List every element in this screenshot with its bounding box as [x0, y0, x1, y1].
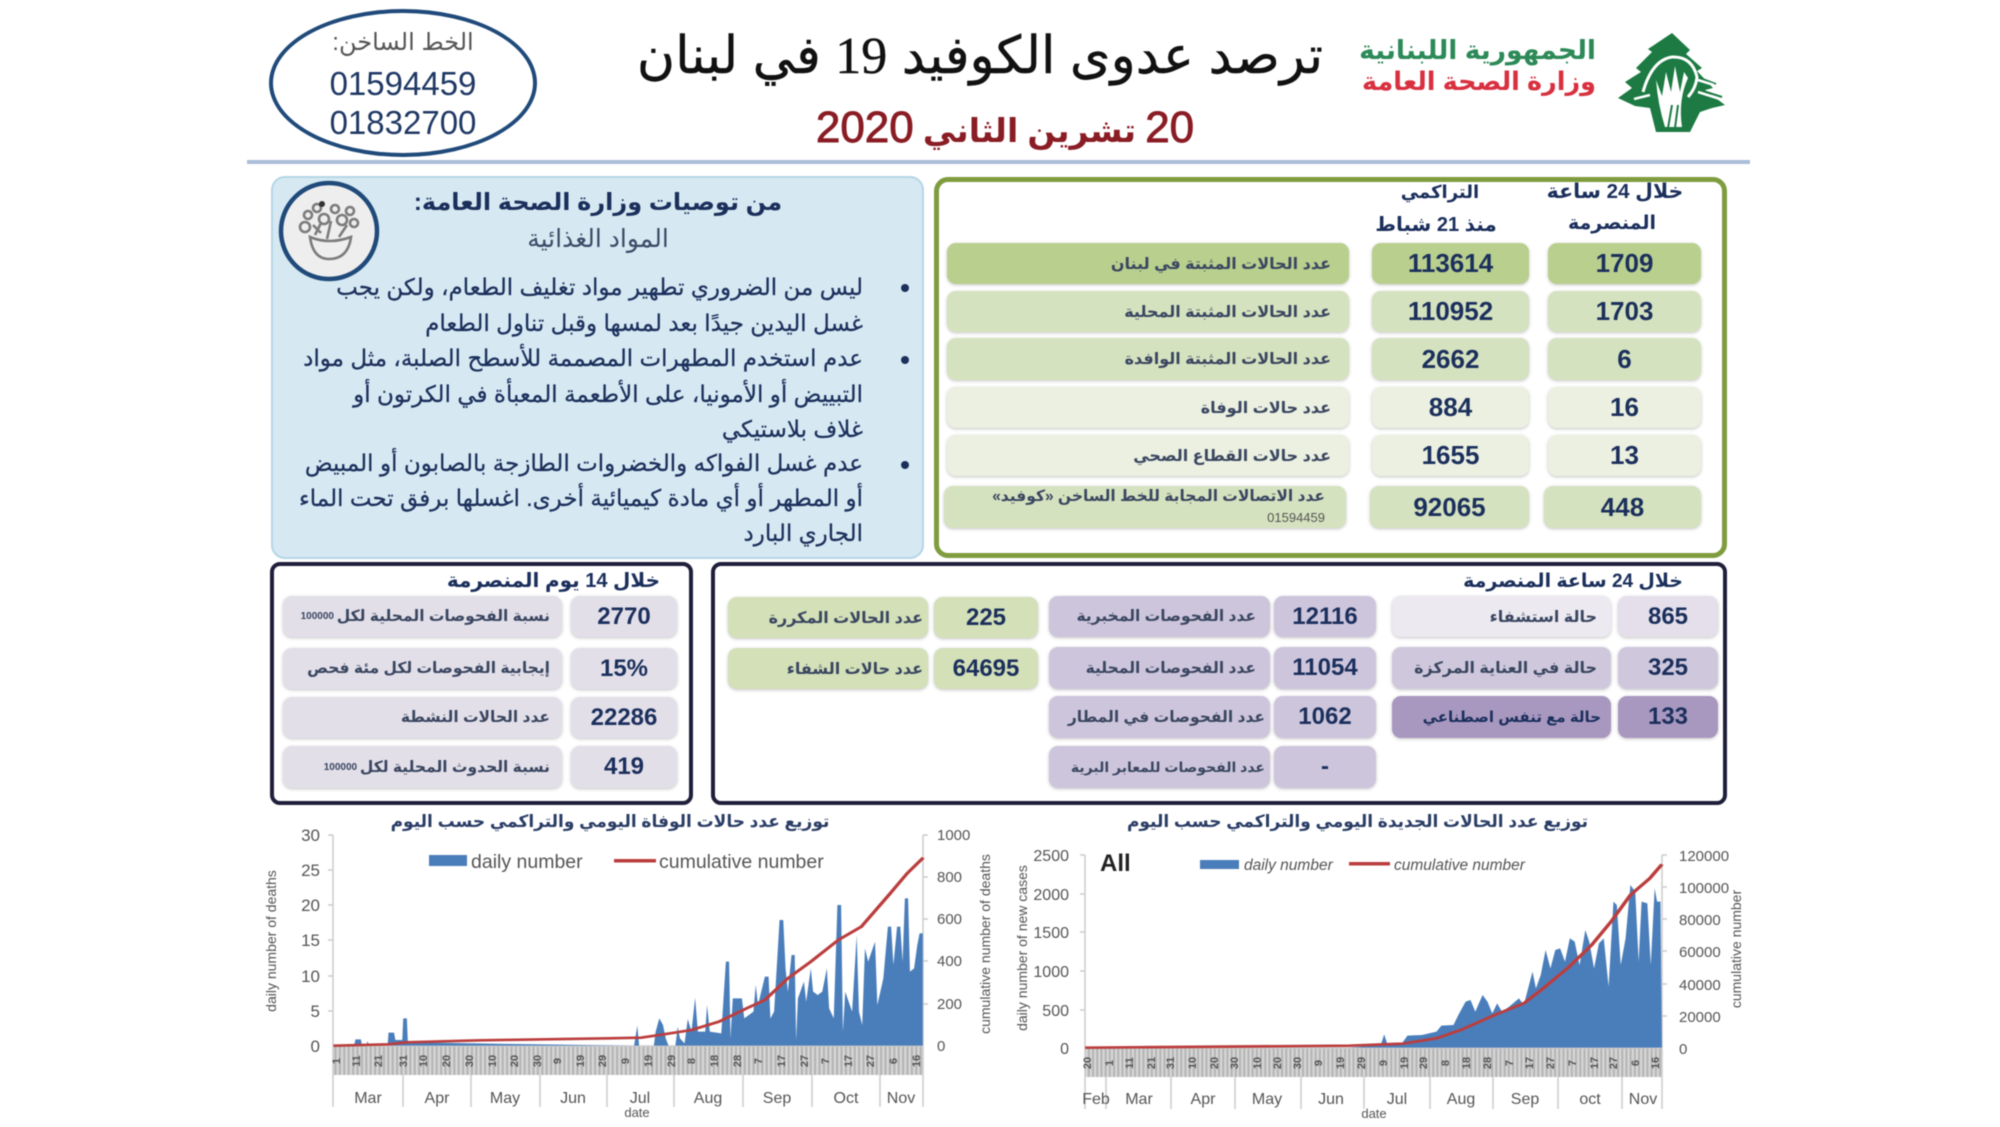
column header: last 24 hours: خلال 24 ساعة [1547, 180, 1683, 203]
month labels: Jun [1318, 1091, 1344, 1108]
panel: cases table [934, 177, 1727, 558]
row: tests per 100000: 100000 [301, 611, 334, 622]
tick labels: 20 [1272, 1057, 1284, 1069]
column header: last 24 hours: المنصرمة [1568, 213, 1656, 234]
tick labels: 7 [753, 1058, 765, 1064]
month labels [354, 1090, 915, 1120]
row: incidence: 419 [604, 753, 644, 780]
tick labels: 21 [1146, 1057, 1158, 1069]
row: repeated cases: عدد الحالات المكررة [769, 610, 923, 626]
tick labels: 17 [843, 1055, 855, 1067]
month labels [1082, 1091, 1657, 1121]
tick labels: 9 [552, 1058, 564, 1064]
tick labels: 10 [418, 1055, 430, 1067]
row: hotline calls: 92065 [1413, 492, 1486, 522]
row: tests per 100000 [281, 595, 679, 640]
row: lab tests: 12116 [1292, 602, 1358, 630]
row: ventilated [1390, 695, 1720, 741]
tick labels: 27 [799, 1055, 811, 1067]
row: local tests: عدد الفحوصات المحلية [1086, 660, 1256, 676]
tick labels: 20 [509, 1055, 521, 1067]
right axis numbers: 80000 [1679, 912, 1721, 929]
row: confirmed cases: 113614 [1408, 248, 1493, 278]
right axis numbers [1679, 848, 1729, 1058]
tick labels: 19 [643, 1055, 655, 1067]
left axis numbers: 1000 [1033, 964, 1069, 981]
legend [429, 851, 824, 873]
month labels: Jul [1387, 1091, 1407, 1108]
row: hospitalised: حالة استشفاء [1490, 608, 1597, 626]
recommendations heading: من توصيات وزارة الصحة العامة: [414, 189, 782, 216]
month labels: oct [1579, 1091, 1601, 1108]
bullet three: عدم غسل الفواكه والخضروات الطازجة بالصابون أو المبيض [305, 450, 863, 476]
tick labels: 10 [487, 1055, 499, 1067]
chart: daily and cumulative deaths: cumulative number of deaths [977, 854, 993, 1034]
tick labels: 31 [398, 1055, 410, 1067]
row: local cases: 110952 [1408, 296, 1493, 326]
tick labels: 11 [1124, 1057, 1136, 1069]
row: hotline calls: 448 [1601, 492, 1644, 522]
tick labels: 9 [620, 1058, 632, 1064]
row: incidence: 100000 [324, 762, 357, 772]
tick labels: 30 [532, 1055, 544, 1067]
tick labels: 30 [1292, 1057, 1304, 1069]
right axis numbers: 200 [937, 996, 962, 1013]
cumulative line [333, 858, 923, 1046]
tick labels: 8 [1440, 1060, 1452, 1066]
row: health sector cases [945, 434, 1703, 479]
panel: last 14 days [270, 562, 693, 805]
month labels: date [624, 1105, 650, 1120]
left axis numbers: 5 [311, 1002, 320, 1021]
column header: cumulative [1375, 182, 1497, 236]
month labels: Apr [425, 1090, 450, 1107]
month labels: Sep [763, 1090, 791, 1107]
left axis numbers: 0 [311, 1037, 320, 1056]
tick labels: 28 [732, 1055, 744, 1067]
tick labels: 17 [1524, 1057, 1536, 1069]
left axis numbers: 0 [1060, 1041, 1069, 1058]
tick labels: 27 [1545, 1057, 1557, 1069]
legend: cumulative number [659, 851, 824, 873]
bullet three: أو المطهر أو أي مادة كيميائية أخرى. اغسلها برفق تحت الماء [299, 485, 863, 511]
row: imported cases [945, 337, 1703, 383]
row: local tests [1047, 646, 1378, 692]
left axis numbers: 2500 [1033, 848, 1069, 865]
bullet list [299, 274, 910, 548]
main title: ترصد عدوى الكوفيد 19 في لبنان [637, 27, 1323, 85]
tick labels: 8 [686, 1058, 698, 1064]
left axis numbers [1033, 848, 1069, 1058]
month labels: Oct [834, 1090, 859, 1107]
right axis numbers [937, 827, 970, 1055]
row: recovered cases: عدد حالات الشفاء [787, 660, 923, 678]
tick labels: 29 [597, 1055, 609, 1067]
row: land border tests [1047, 745, 1378, 791]
tick labels: 18 [709, 1055, 721, 1067]
left axis numbers: 25 [301, 861, 320, 880]
row: repeated cases [726, 596, 1040, 641]
row: confirmed cases [945, 242, 1703, 287]
row: repeated cases: 225 [966, 604, 1006, 630]
row: intensive care: 325 [1648, 654, 1688, 681]
row: hotline calls: عدد الاتصالات المجابة للخط الساخن «كوفيد» [992, 488, 1325, 505]
row: airport tests: 1062 [1298, 703, 1352, 730]
tick labels: 29 [1418, 1057, 1430, 1069]
tick labels [331, 1055, 923, 1067]
row: ventilated: 133 [1648, 703, 1688, 730]
tick labels: 1 [1104, 1060, 1116, 1066]
chart: daily and cumulative cases: cumulative number [1728, 890, 1744, 1008]
row: hospitalised: 865 [1648, 602, 1688, 630]
legend: daily number [471, 851, 583, 873]
right axis numbers: 0 [937, 1038, 945, 1055]
left axis numbers: 15 [301, 931, 320, 950]
tick labels: 17 [1589, 1057, 1601, 1069]
month labels: Jul [630, 1090, 650, 1107]
column header: last 24 hours [1547, 180, 1683, 234]
left axis numbers: 10 [301, 967, 320, 986]
row: active cases [281, 696, 679, 741]
bullet three [299, 447, 910, 548]
row: hotline calls [942, 485, 1703, 531]
axes and month separators [328, 835, 928, 1107]
row: lab tests [1047, 595, 1378, 640]
right axis numbers: 60000 [1679, 944, 1721, 961]
panel: last 24 hours [711, 562, 1727, 805]
tick labels: 19 [1335, 1057, 1347, 1069]
tick labels: 20 [1082, 1057, 1094, 1069]
bullet two: التبييض أو الأمونيا، على الأطعمة المعبأة في الكرتون أو [353, 381, 863, 407]
legend [1200, 857, 1526, 874]
month labels: May [490, 1090, 520, 1107]
month labels: Mar [1125, 1091, 1153, 1108]
row: positivity [281, 647, 679, 692]
panel: recommendations [271, 176, 924, 559]
row: deaths: عدد حالات الوفاة [1201, 400, 1331, 416]
month labels: Aug [694, 1090, 722, 1107]
hotline label: الخط الساخن: [332, 29, 474, 56]
all marker: All [1100, 850, 1131, 877]
bullet one: ليس من الضروري تطهير مواد تغليف الطعام، ولكن يجب [336, 274, 863, 300]
left axis numbers: 30 [301, 826, 320, 845]
row: positivity: 15% [600, 654, 648, 682]
right axis numbers: 40000 [1679, 977, 1721, 994]
row: tests per 100000: 2770 [597, 602, 651, 630]
bullet two: عدم استخدم المطهرات المصممة للأسطح الصلبة، مثل مواد [303, 345, 863, 371]
chart: daily and cumulative deaths [265, 826, 993, 1120]
right axis numbers: 120000 [1679, 848, 1729, 865]
bullet one [336, 274, 910, 338]
row: imported cases: 6 [1617, 344, 1632, 374]
row: intensive care: حالة في العناية المركزة [1414, 660, 1597, 677]
row: deaths: 16 [1610, 392, 1639, 422]
row: hospitalised [1390, 595, 1720, 640]
tick labels: 28 [1482, 1057, 1494, 1069]
row: recovered cases: 64695 [953, 654, 1019, 682]
row: health sector cases: عدد حالات القطاع الصحي [1133, 448, 1331, 464]
tick labels: 19 [1399, 1057, 1411, 1069]
tick labels: 16 [1650, 1057, 1662, 1069]
tick labels: 27 [1608, 1057, 1620, 1069]
row: tests per 100000: نسبة الفحوصات المحلية لكل [337, 608, 550, 625]
row: airport tests: عدد الفحوصات في المطار [1068, 708, 1265, 726]
tick labels: 11 [351, 1055, 363, 1067]
row: health sector cases: 13 [1610, 440, 1639, 470]
month labels: Sep [1511, 1091, 1539, 1108]
month labels: Apr [1191, 1091, 1216, 1108]
tick labels: 7 [820, 1058, 832, 1064]
row: airport tests [1047, 695, 1378, 741]
chart: cases title: توزيع عدد الحالات الجديدة اليومي والتراكمي حسب اليوم [1127, 812, 1588, 831]
left axis numbers: 2000 [1033, 887, 1069, 904]
row: land border tests: - [1321, 753, 1329, 780]
tick labels: 7 [1504, 1060, 1516, 1066]
legend: cumulative number [1394, 857, 1526, 874]
row: recovered cases [726, 647, 1040, 692]
tick labels: 19 [575, 1055, 587, 1067]
tick labels: 30 [464, 1055, 476, 1067]
column header: cumulative: التراكمي [1401, 182, 1479, 202]
row: local cases: عدد الحالات المثبتة المحلية [1124, 304, 1331, 320]
right axis numbers: 800 [937, 869, 962, 886]
month labels: Aug [1447, 1091, 1475, 1108]
tick labels: 9 [1378, 1060, 1390, 1066]
tick labels: 30 [1229, 1057, 1241, 1069]
right axis numbers: 20000 [1679, 1009, 1721, 1026]
right axis numbers: 600 [937, 911, 962, 928]
row: active cases: 22286 [591, 704, 657, 730]
left axis numbers: 1500 [1033, 925, 1069, 942]
row: health sector cases: 1655 [1422, 440, 1479, 470]
row: active cases: عدد الحالات النشطة [401, 709, 550, 726]
row: lab tests: عدد الفحوصات المخبرية [1076, 608, 1256, 625]
month labels: Feb [1082, 1091, 1110, 1108]
month labels: Nov [887, 1090, 915, 1107]
chart: deaths title: توزيع عدد حالات الوفاة اليومي والتراكمي حسب اليوم [391, 812, 829, 831]
row: confirmed cases: 1709 [1596, 248, 1653, 278]
tick labels: 10 [1252, 1057, 1264, 1069]
left axis numbers [301, 826, 320, 1056]
daily bars [1085, 864, 1662, 1048]
tick labels: 10 [1187, 1057, 1199, 1069]
column header: cumulative: منذ 21 شباط [1375, 214, 1497, 236]
tick labels: 16 [911, 1055, 923, 1067]
row: local tests: 11054 [1292, 654, 1358, 681]
axes and month separators [1080, 855, 1667, 1109]
row: positivity: إيجابية الفحوصات لكل مئة فحص [307, 660, 550, 677]
row: local cases: 1703 [1596, 296, 1653, 326]
republic line: الجمهورية اللبنانية [1359, 35, 1596, 65]
right axis numbers: 0 [1679, 1041, 1687, 1058]
row: hotline calls: 01594459 [1267, 510, 1325, 525]
month labels: Mar [354, 1090, 382, 1107]
bullet two: غلاف بلاستيكي [722, 416, 863, 442]
cumulative line [1085, 864, 1662, 1048]
row: imported cases: عدد الحالات المثبتة الوافدة [1125, 351, 1331, 368]
hotline ellipse [269, 9, 537, 157]
tick labels: 18 [1461, 1057, 1473, 1069]
row: imported cases: 2662 [1422, 344, 1479, 374]
row: ventilated: حالة مع تنفس اصطناعي [1423, 709, 1601, 726]
row: land border tests: عدد الفحوصات للمعابر البرية [1071, 758, 1265, 774]
row: confirmed cases: عدد الحالات المثبتة في لبنان [1111, 256, 1331, 272]
row: intensive care [1390, 646, 1720, 692]
row: incidence [281, 745, 679, 791]
right axis numbers: 400 [937, 953, 962, 970]
row: deaths: 884 [1429, 392, 1472, 422]
tick labels: 6 [888, 1058, 900, 1064]
tick labels: 6 [1630, 1060, 1642, 1066]
tick band [333, 1046, 923, 1075]
tick labels: 29 [666, 1055, 678, 1067]
month labels: Jun [560, 1090, 586, 1107]
tick labels: 1 [331, 1058, 343, 1064]
row: local cases [945, 290, 1703, 335]
month labels: Nov [1629, 1091, 1657, 1108]
tick labels: 27 [865, 1055, 877, 1067]
tick labels: 20 [1209, 1057, 1221, 1069]
left axis numbers: 500 [1042, 1003, 1069, 1020]
bullet two [303, 343, 910, 444]
ministry name [1359, 35, 1596, 97]
tick labels: 31 [1165, 1057, 1177, 1069]
tick labels: 7 [1567, 1060, 1579, 1066]
row: deaths [945, 386, 1703, 431]
bullet one: غسل اليدين جيدًا بعد لمسها وقبل تناول الطعام [425, 310, 863, 336]
hotline number two: 01832700 [330, 104, 476, 141]
date heading: 20 تشرين الثاني 2020 [816, 103, 1194, 152]
tick band [1085, 1048, 1662, 1077]
tick labels: 21 [373, 1055, 385, 1067]
recommendations subheading: المواد الغذائية [527, 225, 669, 253]
daily bars [333, 858, 923, 1046]
heading: last 24 hours: خلال 24 ساعة المنصرمة [1463, 571, 1683, 592]
right axis numbers: 1000 [937, 827, 970, 844]
right axis numbers: 100000 [1679, 880, 1729, 897]
left axis numbers: 20 [301, 896, 320, 915]
tick labels: 29 [1356, 1057, 1368, 1069]
chart: daily and cumulative cases [1015, 848, 1744, 1121]
tick labels [1082, 1057, 1662, 1069]
hotline number one: 01594459 [330, 65, 476, 102]
tick labels: 17 [776, 1055, 788, 1067]
legend: daily number [1244, 857, 1334, 874]
row: incidence: نسبة الحدوث المحلية لكل [360, 758, 550, 776]
ministry line: وزارة الصحة العامة [1362, 68, 1596, 96]
icon: food bowl [278, 180, 380, 282]
month labels: date [1361, 1106, 1387, 1121]
month labels: May [1252, 1091, 1282, 1108]
header rule [247, 160, 1750, 164]
tick labels: 9 [1313, 1060, 1325, 1066]
icon: cedar logo [1618, 32, 1726, 133]
heading: last 14 days: خلال 14 يوم المنصرمة [447, 570, 660, 592]
bullet three: الجاري البارد [744, 520, 863, 546]
tick labels: 20 [441, 1055, 453, 1067]
